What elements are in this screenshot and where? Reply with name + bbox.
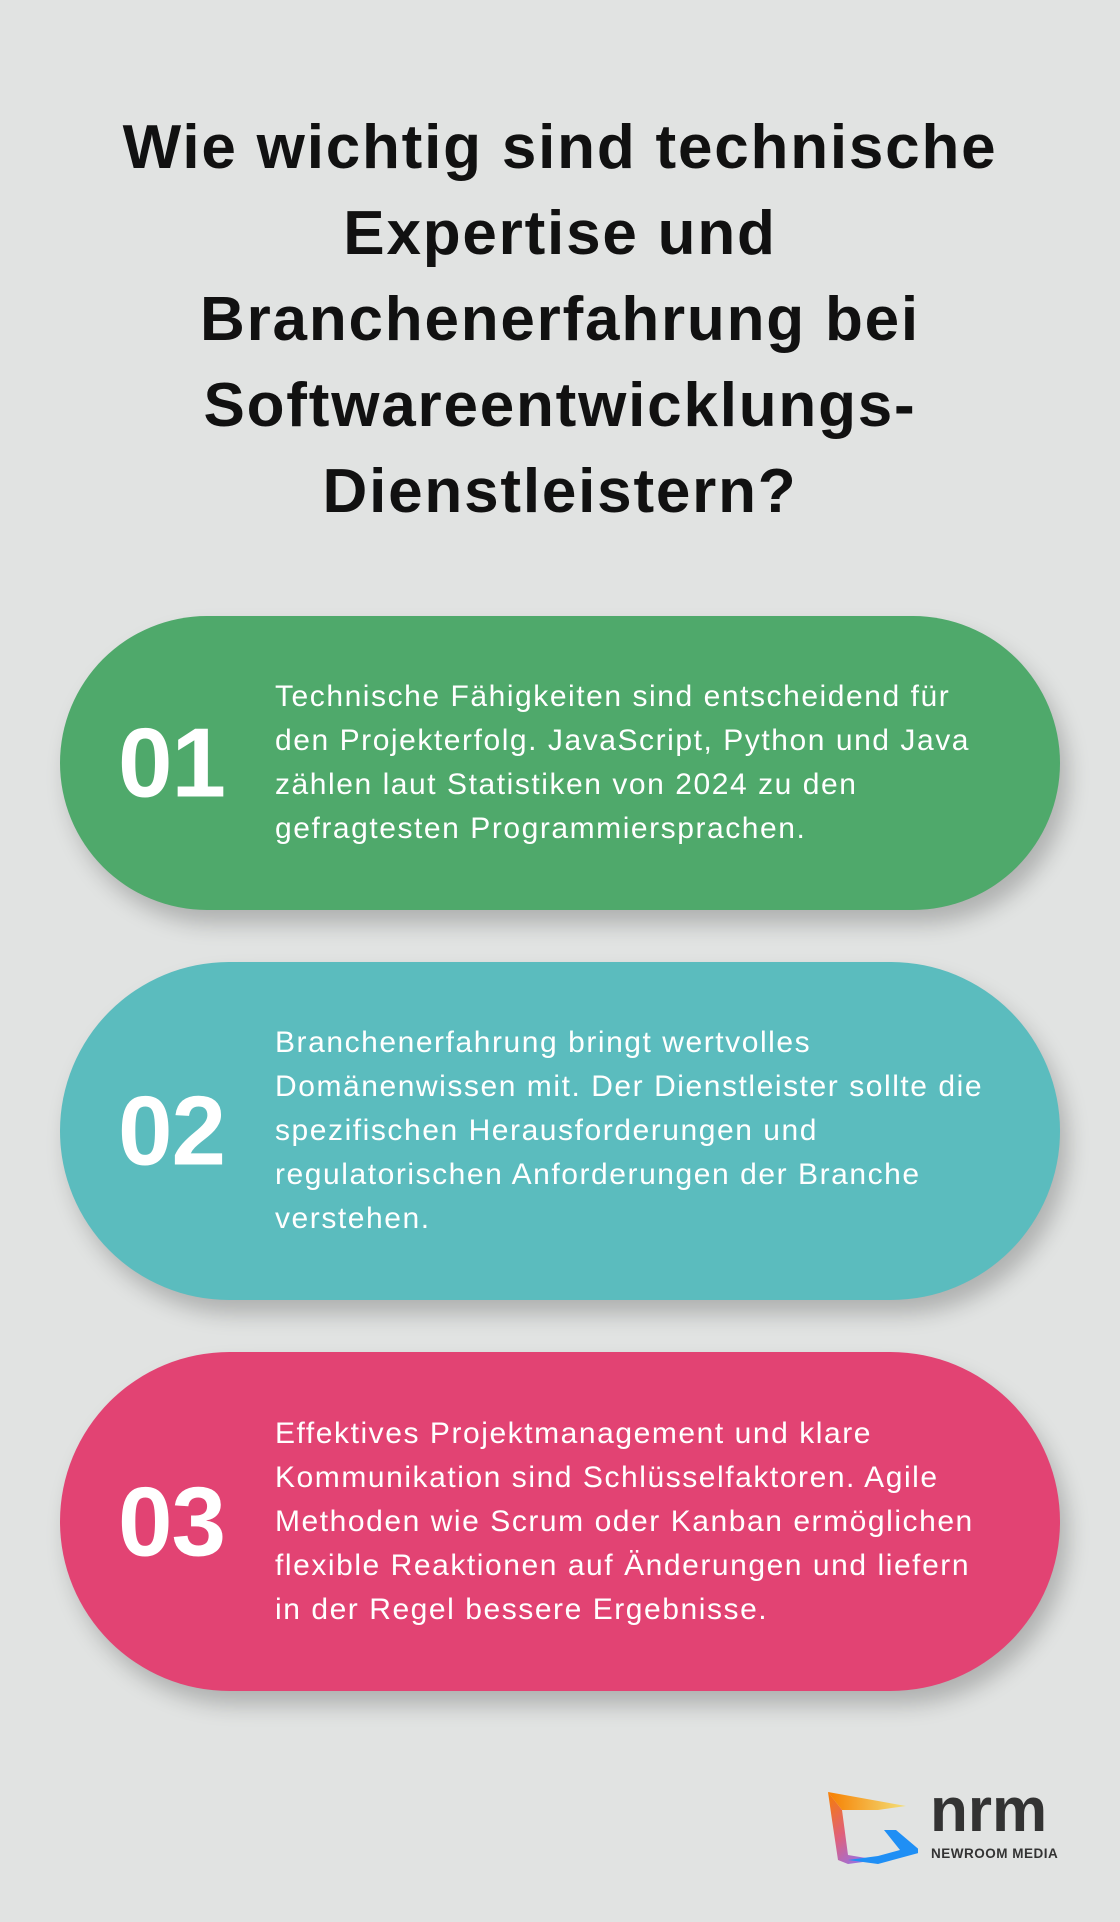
text 02: Branchenerfahrung bringt wertvolles <box>275 1026 811 1059</box>
number 02: 02 <box>118 1076 225 1186</box>
text 03: Methoden wie Scrum oder Kanban ermöglichen <box>275 1504 974 1538</box>
text 01: gefragtesten Programmiersprachen. <box>275 812 806 845</box>
text 02: Domänenwissen mit. Der Dienstleister sollte die <box>275 1070 983 1103</box>
text 01 <box>275 680 970 845</box>
number 01: 01 <box>118 708 225 818</box>
text 01: den Projekterfolg. JavaScript, Python und Java <box>275 724 970 757</box>
title: Branchenerfahrung bei <box>200 285 920 354</box>
text 02: regulatorischen Anforderungen der Branche <box>275 1158 921 1191</box>
brand text: nrm <box>930 1776 1047 1845</box>
title: Wie wichtig sind technische <box>123 113 997 182</box>
panel: 02 <box>60 962 1060 1300</box>
number 03: 03 <box>118 1466 225 1576</box>
panel: 01 <box>60 616 1060 910</box>
title: Softwareentwicklungs- <box>203 371 917 440</box>
icon: logo mark <box>828 1792 918 1864</box>
text 02: spezifischen Herausforderungen und <box>275 1114 818 1147</box>
text 02: verstehen. <box>275 1202 431 1235</box>
text 03: in der Regel bessere Ergebnisse. <box>275 1592 768 1626</box>
text 02 <box>275 1026 983 1235</box>
title: Expertise und <box>343 199 777 268</box>
logo: NEWROOM MEDIA <box>931 1846 1058 1861</box>
text 03 <box>275 1416 974 1626</box>
text 01: zählen laut Statistiken von 2024 zu den <box>275 768 857 801</box>
title <box>122 113 997 526</box>
text 03: Effektives Projektmanagement und klare <box>275 1416 872 1450</box>
logo <box>828 1776 1058 1864</box>
title: Dienstleistern? <box>323 457 797 526</box>
text 01: Technische Fähigkeiten sind entscheidend für <box>275 680 950 713</box>
panel: 03 <box>60 1352 1060 1691</box>
text 03: flexible Reaktionen auf Änderungen und liefern <box>275 1548 970 1582</box>
text 03: Kommunikation sind Schlüsselfaktoren. Agile <box>275 1460 939 1494</box>
